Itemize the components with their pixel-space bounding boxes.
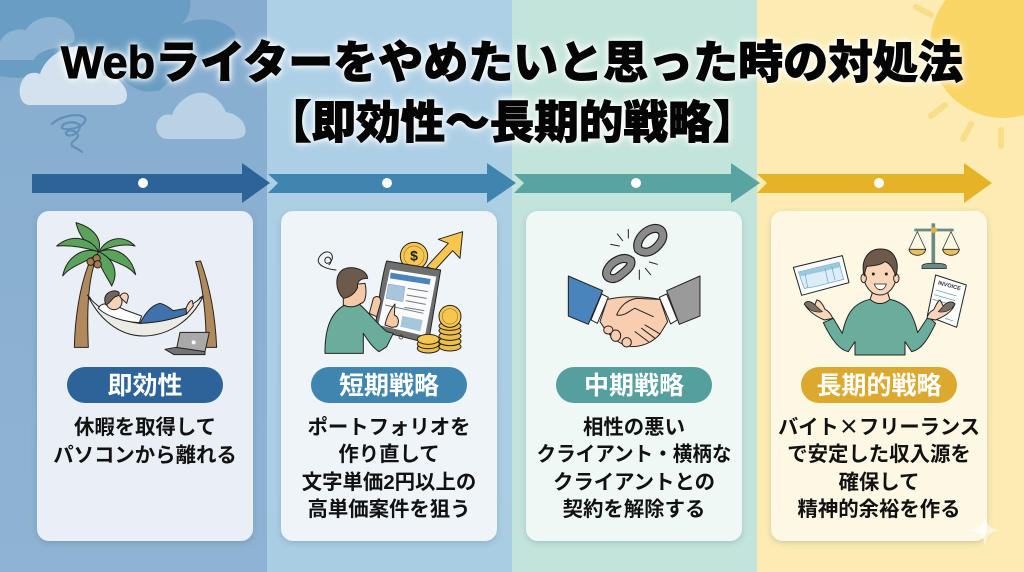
arrow: short-term	[268, 163, 516, 203]
text: immediate: パソコンから離れる	[53, 444, 237, 467]
text: immediate: 休暇を取得して	[74, 416, 216, 439]
icon: sparkle	[966, 514, 1000, 547]
panel: long-term card	[771, 211, 987, 541]
panel background: long-term column	[757, 0, 1024, 572]
arrow: long-term	[757, 163, 992, 203]
panel background: mid-term column	[512, 0, 757, 572]
text: mid-term	[536, 416, 732, 521]
text: mid-term: 相性の悪い	[583, 416, 685, 439]
label: immediate: 即効性	[107, 372, 183, 400]
icon: palm tree hammock	[57, 223, 217, 355]
icon: smiling person with documents and scales	[793, 223, 966, 355]
panel: immediate card	[37, 211, 253, 541]
label: mid-term	[556, 367, 712, 403]
label: immediate	[67, 367, 223, 403]
icon: person with tablet and coins: $	[410, 248, 418, 264]
text: mid-term: 契約を解除する	[563, 498, 705, 521]
panel background: immediate column	[0, 0, 267, 572]
text: short-term	[302, 416, 476, 521]
text: long-term: 確保して	[839, 471, 919, 494]
title: Webライターをやめたいと思った時の対処法	[61, 37, 963, 88]
text: mid-term: クライアントとの	[553, 471, 715, 494]
label: mid-term: 中期戦略	[584, 372, 684, 400]
text: short-term: ポートフォリオを	[307, 416, 471, 439]
panel: short-term card	[281, 211, 497, 541]
text: short-term: 高単価案件を狙う	[307, 498, 471, 521]
text: immediate	[53, 416, 237, 467]
text: long-term: バイト×フリーランス	[778, 410, 980, 440]
icon: smiling person with documents and scales: INVOICE	[937, 280, 961, 292]
icon: sun	[916, 0, 1024, 146]
label: long-term: 長期的戦略	[816, 372, 942, 400]
text: short-term: 作り直して	[338, 443, 440, 466]
icon: storm clouds	[0, 0, 246, 152]
text: short-term: 文字単価2円以上の	[302, 471, 476, 494]
label: short-term: 短期戦略	[339, 372, 439, 400]
label: long-term	[801, 367, 957, 403]
panel background: short-term column	[267, 0, 512, 572]
icon: broken chain and handshake	[568, 228, 700, 347]
title: 【即効性～長期的戦略】	[267, 97, 757, 148]
panel: mid-term card	[526, 211, 742, 541]
icon: person with tablet and coins	[318, 232, 463, 353]
text: long-term: 精神的余裕を作る	[797, 498, 961, 521]
text: long-term: で安定した収入源を	[787, 443, 971, 466]
title	[61, 37, 963, 148]
text: mid-term: クライアント・横柄な	[536, 443, 732, 466]
label: short-term	[311, 367, 467, 403]
arrow: immediate	[32, 163, 270, 203]
text: long-term	[778, 410, 980, 521]
arrow: mid-term	[514, 163, 760, 203]
